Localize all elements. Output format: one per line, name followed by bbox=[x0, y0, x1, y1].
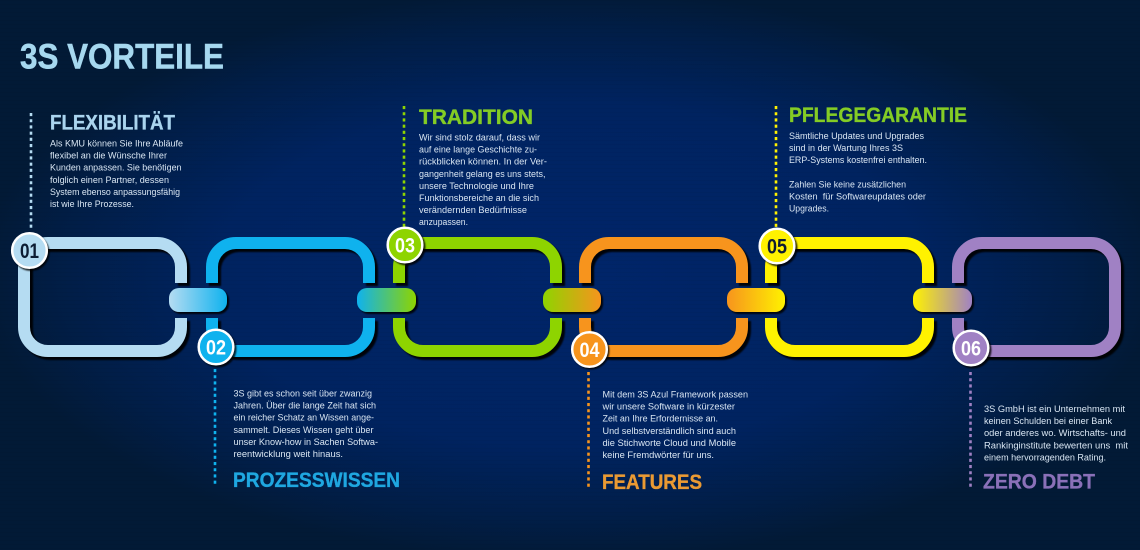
heading: FEATURES bbox=[602, 471, 702, 494]
panel: Prozesswissen bbox=[233, 388, 400, 492]
body text: Jahren. Über die lange Zeit hat sich bbox=[234, 401, 376, 412]
badge 01 bbox=[12, 233, 50, 271]
body text: sind in der Wartung Ihres 3S bbox=[789, 143, 903, 154]
body text: Funktionsbereiche an die sich bbox=[419, 193, 539, 204]
panel: Tradition bbox=[419, 106, 547, 228]
body text: Zahlen Sie keine zusätzlichen bbox=[789, 179, 906, 190]
body text: Kosten für Softwareupdates oder bbox=[789, 192, 927, 202]
body text: auf eine lange Geschichte zu- bbox=[419, 145, 537, 156]
body text bbox=[789, 131, 927, 215]
link 6 bbox=[958, 243, 1118, 354]
badge 03: 03 bbox=[395, 234, 415, 258]
badge 05: 05 bbox=[767, 236, 787, 258]
link 4 bbox=[585, 243, 745, 354]
heading: ZERO DEBT bbox=[983, 470, 1095, 494]
body text: Zeit an Ihre Erfordernisse an. bbox=[602, 414, 718, 425]
body text: die Stichworte Cloud und Mobile bbox=[602, 438, 736, 449]
panel: Flexibilität bbox=[50, 112, 183, 210]
badge 01: 01 bbox=[20, 240, 39, 263]
body text: Und selbstverständlich sind auch bbox=[602, 426, 736, 437]
badge 03 bbox=[388, 228, 426, 266]
body text: oder anderes wo. Wirtschafts- und bbox=[984, 428, 1126, 439]
badge 06 bbox=[954, 331, 992, 368]
panel: Features bbox=[602, 390, 748, 494]
body text: Als KMU können Sie Ihre Abläufe bbox=[50, 138, 183, 150]
body text: 3S GmbH ist ein Unternehmen mit bbox=[984, 404, 1125, 415]
link 2 bbox=[212, 243, 372, 354]
body text: Sämtliche Updates und Upgrades bbox=[789, 131, 924, 142]
chain of links bbox=[24, 243, 1118, 354]
body text bbox=[234, 388, 378, 460]
body text: ist wie Ihre Prozesse. bbox=[50, 199, 134, 210]
body text bbox=[984, 404, 1128, 463]
body text: unsere Technologie und Ihre bbox=[419, 181, 534, 192]
body text: flexibel an die Wünsche Ihrer bbox=[50, 151, 168, 162]
body text: keinen Schulden bei einer Bank bbox=[984, 416, 1112, 427]
body text: Mit dem 3S Azul Framework passen bbox=[602, 390, 748, 400]
badge 02: 02 bbox=[206, 336, 226, 360]
badge 06: 06 bbox=[961, 338, 981, 360]
badge 04 bbox=[572, 332, 610, 370]
heading: PFLEGEGARANTIE bbox=[789, 104, 967, 127]
body text: rückblicken können. In der Ver- bbox=[419, 157, 547, 168]
body text: Rankinginstitute bewerten uns mit bbox=[984, 440, 1128, 451]
body text: anzupassen. bbox=[419, 217, 468, 228]
body text: System ebenso anpassungsfähig bbox=[50, 187, 180, 198]
panel: Zero Debt bbox=[983, 404, 1128, 494]
panel: Pflegegarantie bbox=[789, 104, 967, 215]
body text: ERP-Systems kostenfrei enthalten. bbox=[789, 155, 927, 166]
body text bbox=[419, 132, 547, 228]
link 5 bbox=[771, 243, 931, 354]
body text: gangenheit gelang es uns stets, bbox=[419, 169, 546, 180]
body text: keine Fremdwörter für uns. bbox=[602, 450, 714, 461]
body text: Kunden anpassen. Sie benötigen bbox=[50, 163, 182, 174]
heading: FLEXIBILITÄT bbox=[50, 112, 175, 134]
body text: unser Know-how in Sachen Softwa- bbox=[234, 437, 378, 448]
link 3 bbox=[399, 243, 559, 354]
badge 05 bbox=[760, 229, 798, 266]
body text: 3S gibt es schon seit über zwanzig bbox=[234, 388, 372, 400]
body text bbox=[602, 390, 748, 461]
heading: TRADITION bbox=[419, 106, 533, 129]
body text: Upgrades. bbox=[789, 204, 829, 215]
link 1 bbox=[24, 243, 184, 354]
title: 3S VORTEILE bbox=[20, 38, 224, 76]
body text: ein reicher Schatz an Wissen ange- bbox=[234, 413, 374, 424]
body text: wir unsere Software in kürzester bbox=[602, 402, 736, 413]
body text: Wir sind stolz darauf, dass wir bbox=[419, 132, 541, 144]
dotted leader lines bbox=[31, 106, 970, 488]
body text: reentwicklung weit hinaus. bbox=[234, 449, 343, 460]
heading: PROZESSWISSEN bbox=[233, 469, 400, 492]
badge 04: 04 bbox=[580, 339, 600, 362]
badge 02 bbox=[199, 330, 236, 368]
body text bbox=[50, 138, 183, 210]
body text: verändernden Bedürfnisse bbox=[419, 205, 527, 216]
body text: folglich einen Partner, dessen bbox=[50, 175, 169, 186]
connector pills bbox=[169, 288, 974, 314]
body text: sammelt. Dieses Wissen geht über bbox=[234, 425, 374, 436]
body text: einem hervorragenden Rating. bbox=[984, 452, 1106, 463]
